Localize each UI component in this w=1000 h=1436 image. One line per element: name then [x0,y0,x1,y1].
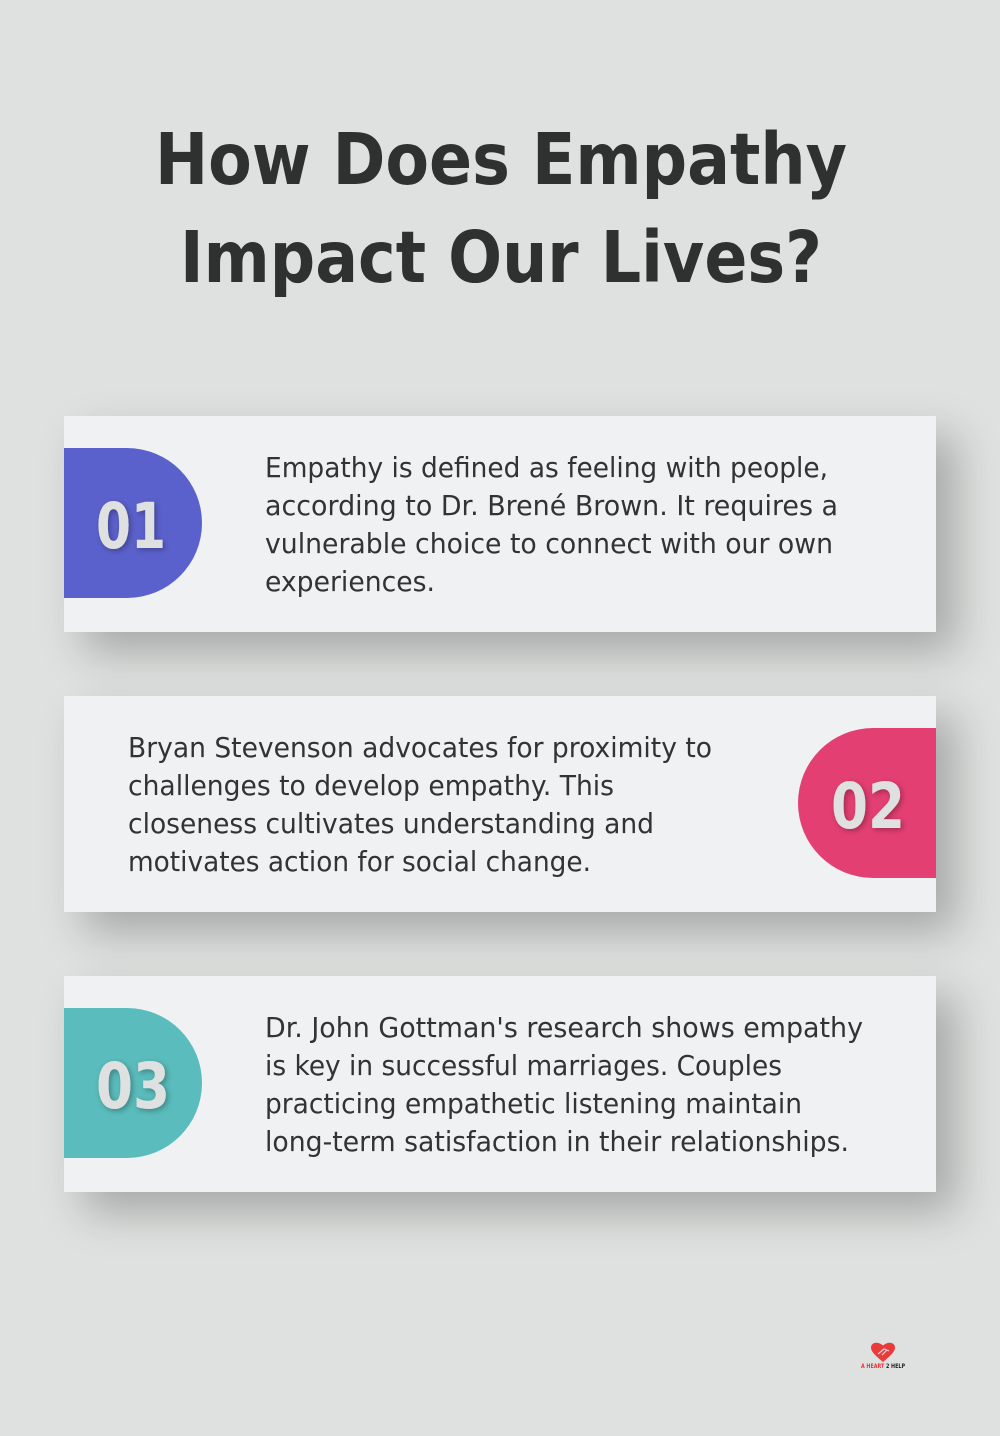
icon: heart [871,1343,895,1362]
text block 1: vulnerable choice to connect with our own [265,527,833,560]
text block 3: practicing empathetic listening maintain [265,1087,802,1120]
text block 2: closeness cultivates understanding and [128,807,654,840]
text block 3: is key in successful marriages. Couples [265,1049,782,1082]
panel: card 1 background [64,416,936,632]
text block 1 [265,451,838,598]
badge 03 [64,1008,202,1158]
badge 03: 03 [96,1050,170,1123]
text block 1: Empathy is defined as feeling with people, [265,451,828,484]
text block 3: Dr. John Gottman's research shows empathy [265,1011,863,1044]
badge 02: 02 [831,770,905,843]
logo: A Heart 2 Help: A HEART 2 HELP [861,1363,905,1370]
title: How Does Empathy [155,118,847,201]
title: Impact Our Lives? [180,216,822,299]
text block 1: according to Dr. Brené Brown. It requires a [265,489,838,522]
text block 2: Bryan Stevenson advocates for proximity to [128,731,712,764]
badge 02 [798,728,936,878]
panel: card 3 background [64,976,936,1192]
text block 3: long-term satisfaction in their relationships. [265,1125,849,1158]
badge 01 [64,448,202,598]
text block 2: motivates action for social change. [128,845,591,878]
text block 1: experiences. [265,565,435,598]
badge 01: 01 [96,490,166,563]
text block 2 [128,731,712,878]
title [155,118,847,299]
logo: A Heart 2 Help [861,1343,905,1370]
text block 3 [265,1011,863,1158]
panel: card 2 background [64,696,936,912]
text block 2: challenges to develop empathy. This [128,769,614,802]
